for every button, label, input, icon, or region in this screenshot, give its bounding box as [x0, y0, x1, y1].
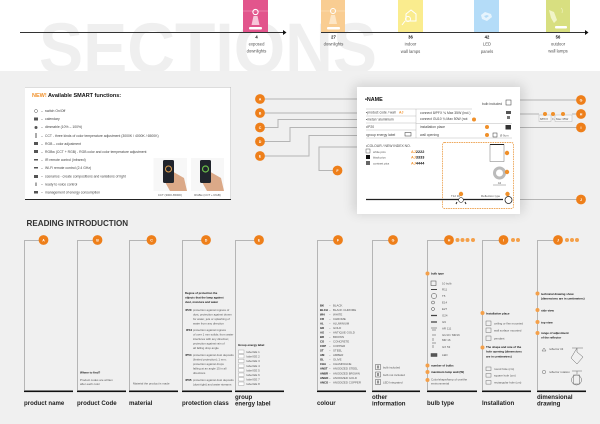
column B: product code: Where to find?	[80, 370, 100, 374]
colour code list: ANBR	[320, 371, 328, 375]
colour code list: ANTIQUE GOLD	[333, 330, 355, 334]
colour code list: –	[329, 340, 331, 344]
phone photo: CCT: CCT (3000-6500K)	[158, 193, 182, 197]
protection class text: protection against drops	[193, 362, 224, 366]
reflector tilt and rotation drawings	[542, 348, 583, 385]
product rows: AJ	[399, 110, 403, 114]
energy label list: label EE 1	[246, 350, 260, 354]
column C: material: Material the product is made	[133, 382, 170, 386]
drawing frame	[366, 142, 514, 208]
column H: bulb type: E14	[442, 300, 448, 304]
smart function list: –	[41, 134, 43, 138]
colour code list: AM	[320, 353, 325, 357]
colour code list: CR	[320, 317, 324, 321]
column G: other information: information	[372, 400, 406, 408]
column B: product code: Product codes are written	[80, 378, 113, 382]
column B: product code: product Code	[77, 400, 117, 407]
colour code list: ANGD	[320, 376, 328, 380]
smart function list	[41, 109, 159, 194]
callout badges on product card: I	[580, 126, 582, 130]
section label: downlights: 27	[331, 34, 336, 40]
protection class text	[185, 291, 234, 386]
callout badges on product card: B	[259, 111, 262, 115]
product rows: •group energy label	[366, 133, 396, 137]
protection class text: protection against dust deposits	[193, 378, 234, 382]
colour code list: WHITE	[333, 312, 342, 316]
colour code list: CO	[320, 340, 325, 344]
section label: downlights: downlights	[324, 42, 343, 46]
energy label list: label EE 5	[246, 368, 260, 372]
section label: indoor wall lamps: wall lamps	[401, 49, 420, 54]
callout badges on product card: C	[259, 126, 262, 130]
protection class text: of over 1 mm solids; from water	[193, 332, 233, 336]
section watermark title: SECTIONS	[39, 10, 377, 89]
colour code list: –	[329, 303, 331, 307]
H connect code detail	[539, 112, 572, 122]
column H: bulb type: H	[448, 238, 451, 242]
column I: installation: pendant	[494, 336, 505, 340]
timeline arrow right	[321, 30, 588, 35]
smart function list: calendary	[45, 117, 60, 121]
smart function icons	[34, 110, 38, 194]
colour code list: GD	[320, 326, 324, 330]
callout badges on product card: G	[580, 98, 583, 102]
callout badges on product card: F	[336, 169, 339, 173]
protection class text: protection against ingress	[193, 328, 226, 332]
protection class text: protection against ingress of	[193, 308, 229, 312]
section label: indoor wall lamps: indoor	[405, 42, 417, 46]
colour code list: OL	[320, 358, 324, 362]
column I: installation: Installation	[482, 400, 514, 407]
column J: dimensional drawing: technical drawing show	[541, 292, 574, 296]
protection class text: IP65	[186, 378, 192, 382]
colour code list: –	[329, 380, 331, 384]
colour code list: –	[329, 321, 331, 325]
callout badges on product card: D	[259, 140, 262, 144]
protection class text: directions	[193, 371, 206, 375]
colour code list: BK	[320, 303, 324, 307]
column B: product code	[77, 235, 126, 407]
callout badges on product card: E	[259, 154, 262, 158]
smart function list: RGBw (CCT + RGB) - RGB color and color temperature adjustment	[45, 150, 146, 154]
smart function list: CCT - three kinds of color temperature adjustment (3000K / 4000K / 6500K)	[45, 134, 159, 138]
smart function list: –	[41, 142, 43, 146]
colour code list	[320, 303, 361, 384]
column G: other information: G	[392, 238, 395, 242]
section label: outdoor wall lamps: 56	[556, 34, 561, 40]
smart function list: –	[41, 166, 43, 170]
column H: bulb type: E27	[442, 307, 448, 311]
product name: •NAME	[365, 97, 383, 103]
smart function list: scenarios - create compositions and variations of light	[45, 174, 126, 178]
smart function list: –	[41, 174, 43, 178]
protection class text: (dust-tight) and water streams	[193, 382, 232, 386]
smart function list: switch On/Off	[45, 109, 65, 113]
column H: bulb type: T5	[442, 294, 446, 298]
column H: bulb type: number of bulbs	[431, 364, 454, 368]
colour list: white pics	[373, 150, 386, 154]
column D: protection class	[182, 235, 234, 407]
column G: other information	[372, 235, 420, 408]
column J: dimensional drawing: (dimensions are in centimetres)	[541, 296, 585, 300]
colour code list: –	[329, 358, 331, 362]
smart function list: –	[41, 109, 43, 113]
section label: indoor wall lamps: 36	[408, 34, 413, 40]
colour code list: –	[329, 312, 331, 316]
section label: LED panels: panels	[481, 49, 493, 54]
smart function list: management of energy consumption	[45, 190, 100, 194]
product rows: •IP20	[366, 125, 374, 129]
column E: group energy label: group	[235, 394, 253, 401]
section label: exposed downlights: exposed	[249, 42, 265, 46]
colour code list: –	[329, 362, 331, 366]
colour list: •COLOUR / NEW INDEX NO.	[366, 144, 411, 148]
H connect code detail: 8/PFX	[540, 117, 548, 121]
colour code list: STEEL	[333, 349, 343, 353]
colour code list: OLIVE	[333, 358, 342, 362]
column J: dimensional drawing: top view	[541, 320, 553, 324]
product rows: bulb included	[482, 102, 502, 106]
section label: exposed downlights	[247, 34, 266, 54]
column H: bulb type: G24	[442, 314, 448, 318]
colour code list: –	[329, 330, 331, 334]
colour code list: BLCH	[320, 308, 328, 312]
column I: installation: wall surface mounted	[494, 328, 522, 332]
energy label list: label EE 3	[246, 359, 260, 363]
product rows	[366, 100, 512, 138]
energy label list: label EE 2	[246, 354, 260, 358]
column H: bulb type: GU10 / MR16	[442, 333, 460, 337]
column H: bulb type	[426, 235, 477, 407]
bulb type icons	[431, 281, 437, 356]
column I: installation: rectangular hole (cm)	[494, 380, 521, 384]
protection class text: objects that the lamp against	[185, 296, 224, 300]
protection class text: protection against rain of	[193, 342, 225, 346]
column H: bulb type: maximum lamp watt (W)	[431, 370, 464, 374]
column D: protection class: protection class	[182, 400, 229, 407]
protection class text: falling at an angle 15 in all	[193, 366, 227, 370]
energy label list: label EE 8	[246, 382, 260, 386]
connector lines to product card	[260, 99, 581, 200]
callout badges on product card: J	[580, 198, 582, 202]
column G: other information: LED Integrated	[383, 380, 403, 384]
colour list	[366, 144, 425, 166]
colour list: black pics	[373, 156, 386, 160]
colour code list: BR	[320, 335, 324, 339]
column C: material: material	[129, 400, 153, 407]
section label: LED panels	[481, 34, 493, 54]
colour code list: ANODIZED STEEL	[333, 367, 358, 371]
section tab: indoor wall lamps	[398, 0, 423, 32]
smart function list: –	[41, 117, 43, 121]
column A: product name: product name	[24, 400, 65, 407]
column H: bulb type: R11	[442, 288, 447, 292]
colour code list: –	[329, 367, 331, 371]
protection class text: IP20	[186, 308, 192, 312]
phone photo: RGBw: RGBw (CCT + RGB)	[194, 193, 221, 197]
section label: exposed downlights: 4	[255, 34, 258, 40]
column J: dimensional drawing: dimensional	[537, 394, 573, 401]
energy label list	[238, 343, 265, 386]
colour list: AJ4444	[411, 162, 425, 166]
colour code list: AL	[320, 321, 324, 325]
section label: outdoor wall lamps	[548, 34, 568, 54]
callout badges on product card	[255, 94, 586, 204]
colour code list: ALUMINIUM	[333, 321, 350, 325]
column H: bulb type: MR 16	[442, 338, 451, 342]
product rows: •product code / wall	[366, 110, 396, 114]
colour code list: –	[329, 326, 331, 330]
section tab: outdoor wall lamps	[546, 0, 570, 32]
column H: bulb type: bulb type	[427, 400, 455, 407]
colour code list: BLACK	[333, 303, 343, 307]
colour code list: AG	[320, 330, 324, 334]
column E: group energy label: energy label	[235, 400, 271, 408]
column I: installation: Installation place	[486, 312, 510, 316]
phone photo: CCT	[154, 158, 187, 197]
colour list: AJ2222	[411, 150, 424, 154]
colour code list: –	[329, 308, 331, 312]
card shadow	[354, 85, 523, 213]
energy label list: label EE 6	[246, 373, 260, 377]
colour code list: –	[329, 349, 331, 353]
protection class text: for water, jets or splashing of	[193, 317, 230, 321]
column H: bulb type: bulb type	[431, 272, 444, 276]
column C: material	[129, 235, 178, 407]
colour code list: ANODIZED COPPER	[333, 380, 361, 384]
phone photo: RGBw	[191, 158, 224, 197]
column F: colour: F	[337, 238, 340, 242]
callout badges on product card: H	[580, 112, 583, 116]
protection class text: IP44	[186, 328, 192, 332]
column H: bulb type: 10 bulb	[442, 282, 452, 286]
protection class text: protection against dust deposits	[193, 353, 234, 357]
colour code list: ANST	[320, 367, 328, 371]
colour code list: GOLD	[333, 326, 341, 330]
column E: group energy label	[235, 235, 284, 408]
smart function list: ready to voice control	[45, 182, 77, 186]
column H: bulb type: G9	[442, 320, 446, 324]
colour code list: CHA	[320, 362, 326, 366]
protection class text: dust, moisture and water	[185, 300, 219, 304]
column F: colour	[317, 235, 366, 407]
column I: installation: The shape and size of the	[486, 345, 522, 349]
colour code list: COPPER	[333, 344, 345, 348]
colour list: contrast pics	[373, 162, 390, 166]
colour code list: –	[329, 344, 331, 348]
column J: dimensional drawing: of the reflector	[541, 336, 562, 340]
column J: dimensional drawing: side view	[541, 308, 555, 312]
energy label list: label EE 4	[246, 364, 260, 368]
product rows: connect 8/PFX ¾ Max 35W (incl.)	[420, 111, 471, 115]
colour code list: WH	[320, 312, 325, 316]
column J: dimensional drawing: reflector tilt	[549, 347, 563, 351]
colour code list: –	[329, 353, 331, 357]
column J: dimensional drawing	[536, 235, 586, 408]
column J: dimensional drawing: J	[557, 238, 559, 242]
colour code list: ANODIZED BROWN	[333, 371, 360, 375]
colour code list: CONCRETE	[333, 340, 349, 344]
section label: downlights	[324, 34, 343, 46]
colour list: AJ3333	[411, 156, 424, 160]
colour code list: CHROME	[333, 317, 346, 321]
colour code list: CHAMPAGNE	[333, 362, 351, 366]
drawing frame: Reflection type	[481, 194, 501, 198]
section label: LED panels: LED	[483, 42, 491, 46]
colour code list: –	[329, 317, 331, 321]
column G: other information: bulb included	[383, 366, 400, 370]
panel: smart functions	[25, 87, 231, 200]
section label: outdoor wall lamps: wall lamps	[548, 48, 568, 54]
drawing frame: 44	[498, 181, 501, 185]
protection class text: dust, protection against drown	[193, 312, 232, 316]
callout badges on product card: A	[259, 97, 262, 101]
section label: outdoor wall lamps: outdoor	[551, 42, 566, 46]
gray cover below watermark	[0, 71, 600, 74]
column I: installation: square hole (cm)	[494, 374, 516, 378]
colour code list: ANODIZED GOLD	[333, 376, 357, 380]
section label: indoor wall lamps	[401, 34, 420, 54]
column H: bulb type: Color/shape/lamp of use/the	[431, 378, 468, 382]
column I: installation: are in centimetres)	[486, 354, 512, 358]
drawing frame: T12 30°	[451, 194, 461, 198]
H connect code detail: Max 35W	[556, 117, 568, 121]
protection class text: all falling drop angle	[193, 346, 219, 350]
column J: dimensional drawing: drawing	[537, 400, 561, 408]
section label: LED panels: 42	[485, 34, 490, 40]
smart function list: –	[41, 190, 43, 194]
column G: other information: other	[372, 394, 388, 401]
heading: available smart functions: NEW! Available SMART functions:	[32, 93, 121, 99]
section tab: downlights	[321, 0, 345, 32]
column B: product code: after each color	[80, 382, 100, 386]
smart function list: dimmable (10% – 100%)	[45, 125, 82, 129]
smart function list: –	[41, 158, 43, 162]
column D: protection class: D	[205, 238, 208, 242]
column E: group energy label: E	[258, 238, 261, 242]
product rows: wall opening	[420, 133, 439, 137]
section tab: exposed downlights	[243, 0, 268, 32]
column J: dimensional drawing: reflector rotation	[549, 370, 570, 374]
column B: product code: B	[96, 238, 99, 242]
product rows: Ø 9cm	[500, 134, 509, 138]
column I: installation: round hole (cm)	[494, 367, 514, 371]
section tab: LED panels	[474, 0, 499, 32]
column F: colour: colour	[317, 400, 336, 407]
orange markers on card	[472, 118, 489, 137]
colour code list: BLACK CHROME	[333, 308, 356, 312]
section label: exposed downlights: downlights	[247, 48, 266, 54]
column C: material: C	[150, 238, 153, 242]
timeline arrow left	[20, 30, 286, 35]
column H: bulb type: LED	[442, 353, 448, 357]
column H: bulb type: GX 53	[442, 345, 451, 349]
protection class text: (limited protection); 1 mm;	[193, 358, 227, 362]
energy label list: label EE 7	[246, 378, 260, 382]
heading: reading introduction: READING INTRODUCTION	[26, 219, 128, 228]
product rows: connect GU10 ¾ Max 50W (not	[420, 117, 468, 121]
column A: product name	[24, 235, 73, 407]
product rows: installation place	[420, 125, 445, 129]
column I: installation: ceiling or flex mounted	[494, 322, 523, 326]
column A: product name: A	[42, 238, 45, 242]
colour code list: AMBER	[333, 353, 343, 357]
protection class text: IP54	[186, 353, 192, 357]
colour code list: –	[329, 376, 331, 380]
smart function list: –	[41, 150, 43, 154]
colour code list: –	[329, 335, 331, 339]
smart function list: –	[41, 182, 43, 186]
column H: bulb type: AR 111	[442, 326, 452, 330]
protection class text: interferes with any direction;	[193, 337, 229, 341]
smart function list: RGB – color adjustment	[45, 142, 81, 146]
smart function list: IR remote control (infrared)	[45, 158, 86, 162]
colour code list: ANCO	[320, 380, 329, 384]
column I: installation	[480, 235, 531, 407]
colour code list: ST	[320, 349, 324, 353]
column I: installation: I	[503, 238, 504, 242]
product rows: •metal / aluminium	[366, 118, 394, 122]
protection class text: Degree of protection the	[185, 291, 218, 295]
H connect code detail: ¾	[552, 117, 555, 121]
column J: dimensional drawing: range of adjustment	[541, 331, 569, 335]
panel: product card example	[357, 87, 520, 214]
column I: installation: hole opening (dimensions	[486, 350, 522, 354]
colour code list: COP	[320, 344, 326, 348]
smart function list: –	[41, 125, 43, 129]
colour code list: BROWN	[333, 335, 344, 339]
column H: bulb type: environmental	[431, 382, 450, 386]
column G: other information: bulb not included	[383, 373, 405, 377]
colour code list: –	[329, 371, 331, 375]
smart function list: Wi-Fi remote control (2.4 GHz)	[45, 166, 91, 170]
energy label list: Group energy label	[238, 343, 265, 347]
protection class text: water from any direction	[193, 322, 224, 326]
